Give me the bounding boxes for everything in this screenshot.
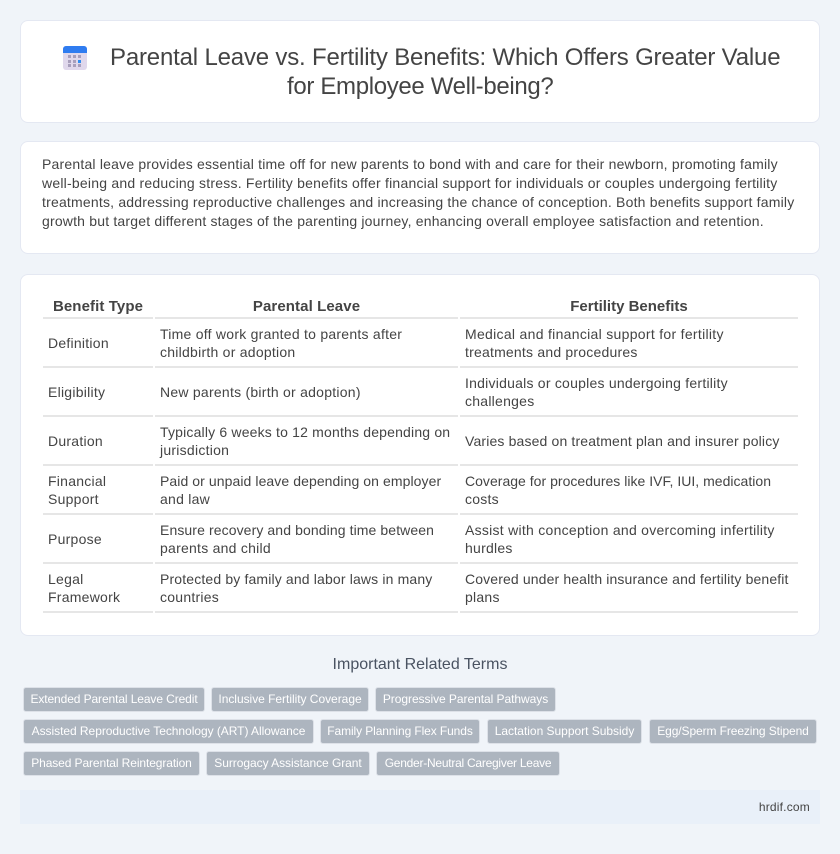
title: Parental Leave vs. Fertility Benefits: Which Offers Greater Value — [110, 44, 780, 71]
table rows: Framework — [48, 589, 120, 605]
table rows: Definition — [48, 335, 109, 351]
related terms tags: Surrogacy Assistance Grant — [214, 756, 362, 770]
table rows: countries — [160, 589, 219, 605]
related terms tags: Lactation Support Subsidy — [495, 724, 634, 738]
intro text: well-being and reducing stress. Fertility benefits offer financial support for individuals or couples undergoing fertility — [42, 175, 778, 191]
related terms tags: Gender-Neutral Caregiver Leave — [385, 756, 551, 770]
table rows: plans — [465, 589, 500, 605]
table rows: Typically 6 weeks to 12 months depending on — [160, 424, 450, 440]
table header — [53, 298, 688, 315]
table rows: Paid or unpaid leave depending on employer — [160, 473, 441, 489]
related terms tags: Assisted Reproductive Technology (ART) Allowance — [32, 724, 305, 738]
table rows: Time off work granted to parents after — [160, 326, 402, 342]
intro text: treatments, addressing reproductive challenges and increasing the chance of conception. Both benefits support family — [42, 194, 794, 210]
table rows: hurdles — [465, 540, 513, 556]
table rows: New parents (birth or adoption) — [160, 384, 361, 400]
table rows: Ensure recovery and bonding time between — [160, 522, 434, 538]
intro card — [20, 141, 820, 254]
table rows: Financial — [48, 473, 106, 489]
related terms tags: Family Planning Flex Funds — [327, 724, 473, 738]
related terms tags: Phased Parental Reintegration — [31, 756, 192, 770]
table rows: Covered under health insurance and fertility benefit — [465, 571, 789, 587]
table rows: Duration — [48, 433, 103, 449]
table rows: Individuals or couples undergoing fertility — [465, 375, 728, 391]
table rows: Legal — [48, 571, 84, 587]
related terms tags: Inclusive Fertility Coverage — [218, 692, 362, 706]
related terms tags: Progressive Parental Pathways — [383, 692, 548, 706]
table rows: childbirth or adoption — [160, 344, 295, 360]
table rows: Coverage for procedures like IVF, IUI, medication — [465, 473, 771, 489]
table rows: costs — [465, 491, 499, 507]
related terms tags: Egg/Sperm Freezing Stipend — [657, 724, 809, 738]
related terms heading: Important Related Terms — [333, 656, 507, 673]
table rows: jurisdiction — [160, 442, 229, 458]
footer bar — [20, 790, 820, 824]
table rows: Assist with conception and overcoming infertility — [465, 522, 775, 538]
intro text: growth but target different stages of the parenting journey, enhancing overall employee satisfaction and retention. — [42, 213, 764, 229]
table rows: Varies based on treatment plan and insurer policy — [465, 433, 780, 449]
table header: Benefit Type — [53, 298, 143, 315]
icon: calendar — [63, 46, 87, 70]
table rows: challenges — [465, 393, 534, 409]
table rows: parents and child — [160, 540, 271, 556]
header card — [20, 20, 820, 123]
title — [110, 44, 780, 100]
table rows: treatments and procedures — [465, 344, 638, 360]
table header: Parental Leave — [253, 298, 360, 315]
table header: Fertility Benefits — [570, 298, 688, 315]
table rows: Medical and financial support for fertility — [465, 326, 724, 342]
table rows: Purpose — [48, 531, 102, 547]
table rows: Support — [48, 491, 99, 507]
title: for Employee Well-being? — [287, 73, 553, 100]
intro text — [42, 156, 794, 229]
related terms tags: Extended Parental Leave Credit — [30, 692, 198, 706]
table rows — [43, 317, 798, 613]
related terms tags — [23, 687, 817, 776]
footer source: hrdif.com — [759, 800, 810, 814]
table card — [20, 274, 820, 636]
intro text: Parental leave provides essential time off for new parents to bond with and care for their newborn, promoting family — [42, 156, 778, 172]
table rows: Protected by family and labor laws in many — [160, 571, 432, 587]
table rows: Eligibility — [48, 384, 105, 400]
table rows: and law — [160, 491, 210, 507]
